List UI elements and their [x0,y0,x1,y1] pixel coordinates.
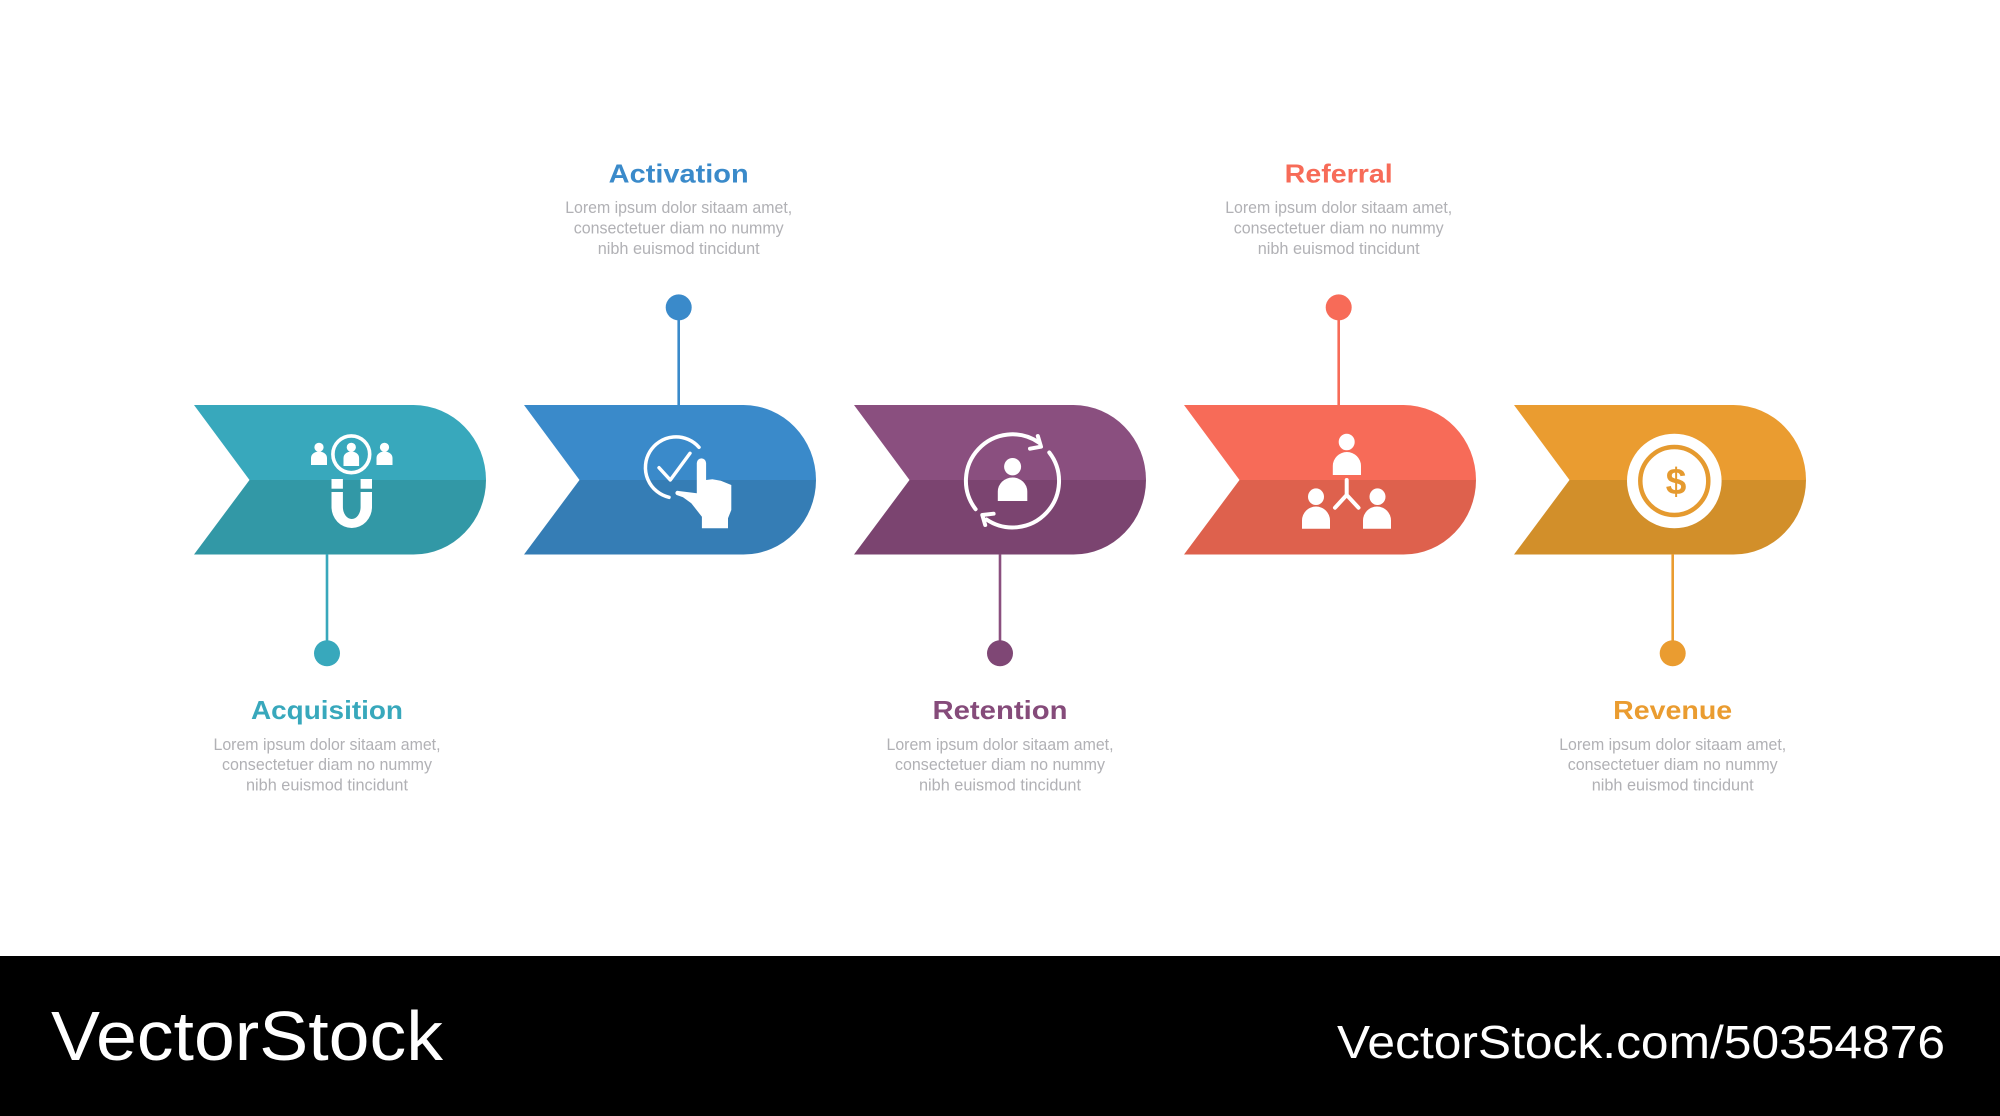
heading: Activation: Activation [609,158,749,188]
text block: Referral: consectetuer diam no nummy [1234,220,1444,238]
connector: Acquisition [314,554,340,666]
step: Retention [854,405,1146,794]
text block: Activation: consectetuer diam no nummy [574,220,784,238]
text block: Retention: nibh euismod tincidunt [919,776,1081,794]
connector: Activation [666,294,692,405]
heading: Acquisition: Acquisition [251,695,403,725]
connector: Revenue [1660,554,1686,666]
connector: Retention [987,554,1013,666]
text block: Retention: Lorem ipsum dolor sitaam amet, [886,736,1114,754]
heading: Revenue: Revenue [1613,695,1732,725]
text block: Revenue: nibh euismod tincidunt [1592,776,1754,794]
text block: Acquisition: Lorem ipsum dolor sitaam amet, [214,736,440,754]
text block: Revenue [1559,736,1786,794]
step: Activation [524,158,816,554]
text block: Retention: consectetuer diam no nummy [895,756,1106,774]
chevron: Revenue [1514,405,1806,554]
text block: Referral: Lorem ipsum dolor sitaam amet, [1225,199,1452,217]
text block: Revenue: Lorem ipsum dolor sitaam amet, [1559,736,1786,754]
chevron: Activation [524,405,816,554]
step: Revenue [1514,405,1806,794]
footer image url: VectorStock.com/50354876 [1337,1016,1945,1068]
text block: Revenue: consectetuer diam no nummy [1568,756,1778,774]
text block: Acquisition: nibh euismod tincidunt [246,776,408,794]
text block: Retention [886,736,1114,794]
connector: Referral [1326,294,1352,405]
chevron: Referral [1184,405,1476,554]
text block: Activation: Lorem ipsum dolor sitaam amet, [565,199,792,217]
footer logo: VectorStock [51,997,444,1075]
heading: Referral: Referral [1285,158,1393,188]
step: Acquisition [194,405,486,794]
chevron: Acquisition [194,405,486,554]
text block: Acquisition [214,736,440,794]
text block: Referral: nibh euismod tincidunt [1258,240,1420,258]
text block: Acquisition: consectetuer diam no nummy [222,756,433,774]
icon: magnet attracting people [311,436,392,528]
footer bar [0,956,2000,1116]
chevron: Retention [854,405,1146,554]
step: Referral [1184,158,1476,554]
icon: dollar coin: $ [1666,461,1687,502]
text block: Activation [565,199,792,258]
heading: Retention: Retention [932,695,1068,725]
icon: hand tapping check mark [645,437,731,528]
icon: dollar coin [1627,434,1722,528]
text block: Activation: nibh euismod tincidunt [598,240,760,258]
icon: person in renewal cycle [966,434,1059,527]
icon: referral people network [1302,434,1391,529]
text block: Referral [1225,199,1452,258]
